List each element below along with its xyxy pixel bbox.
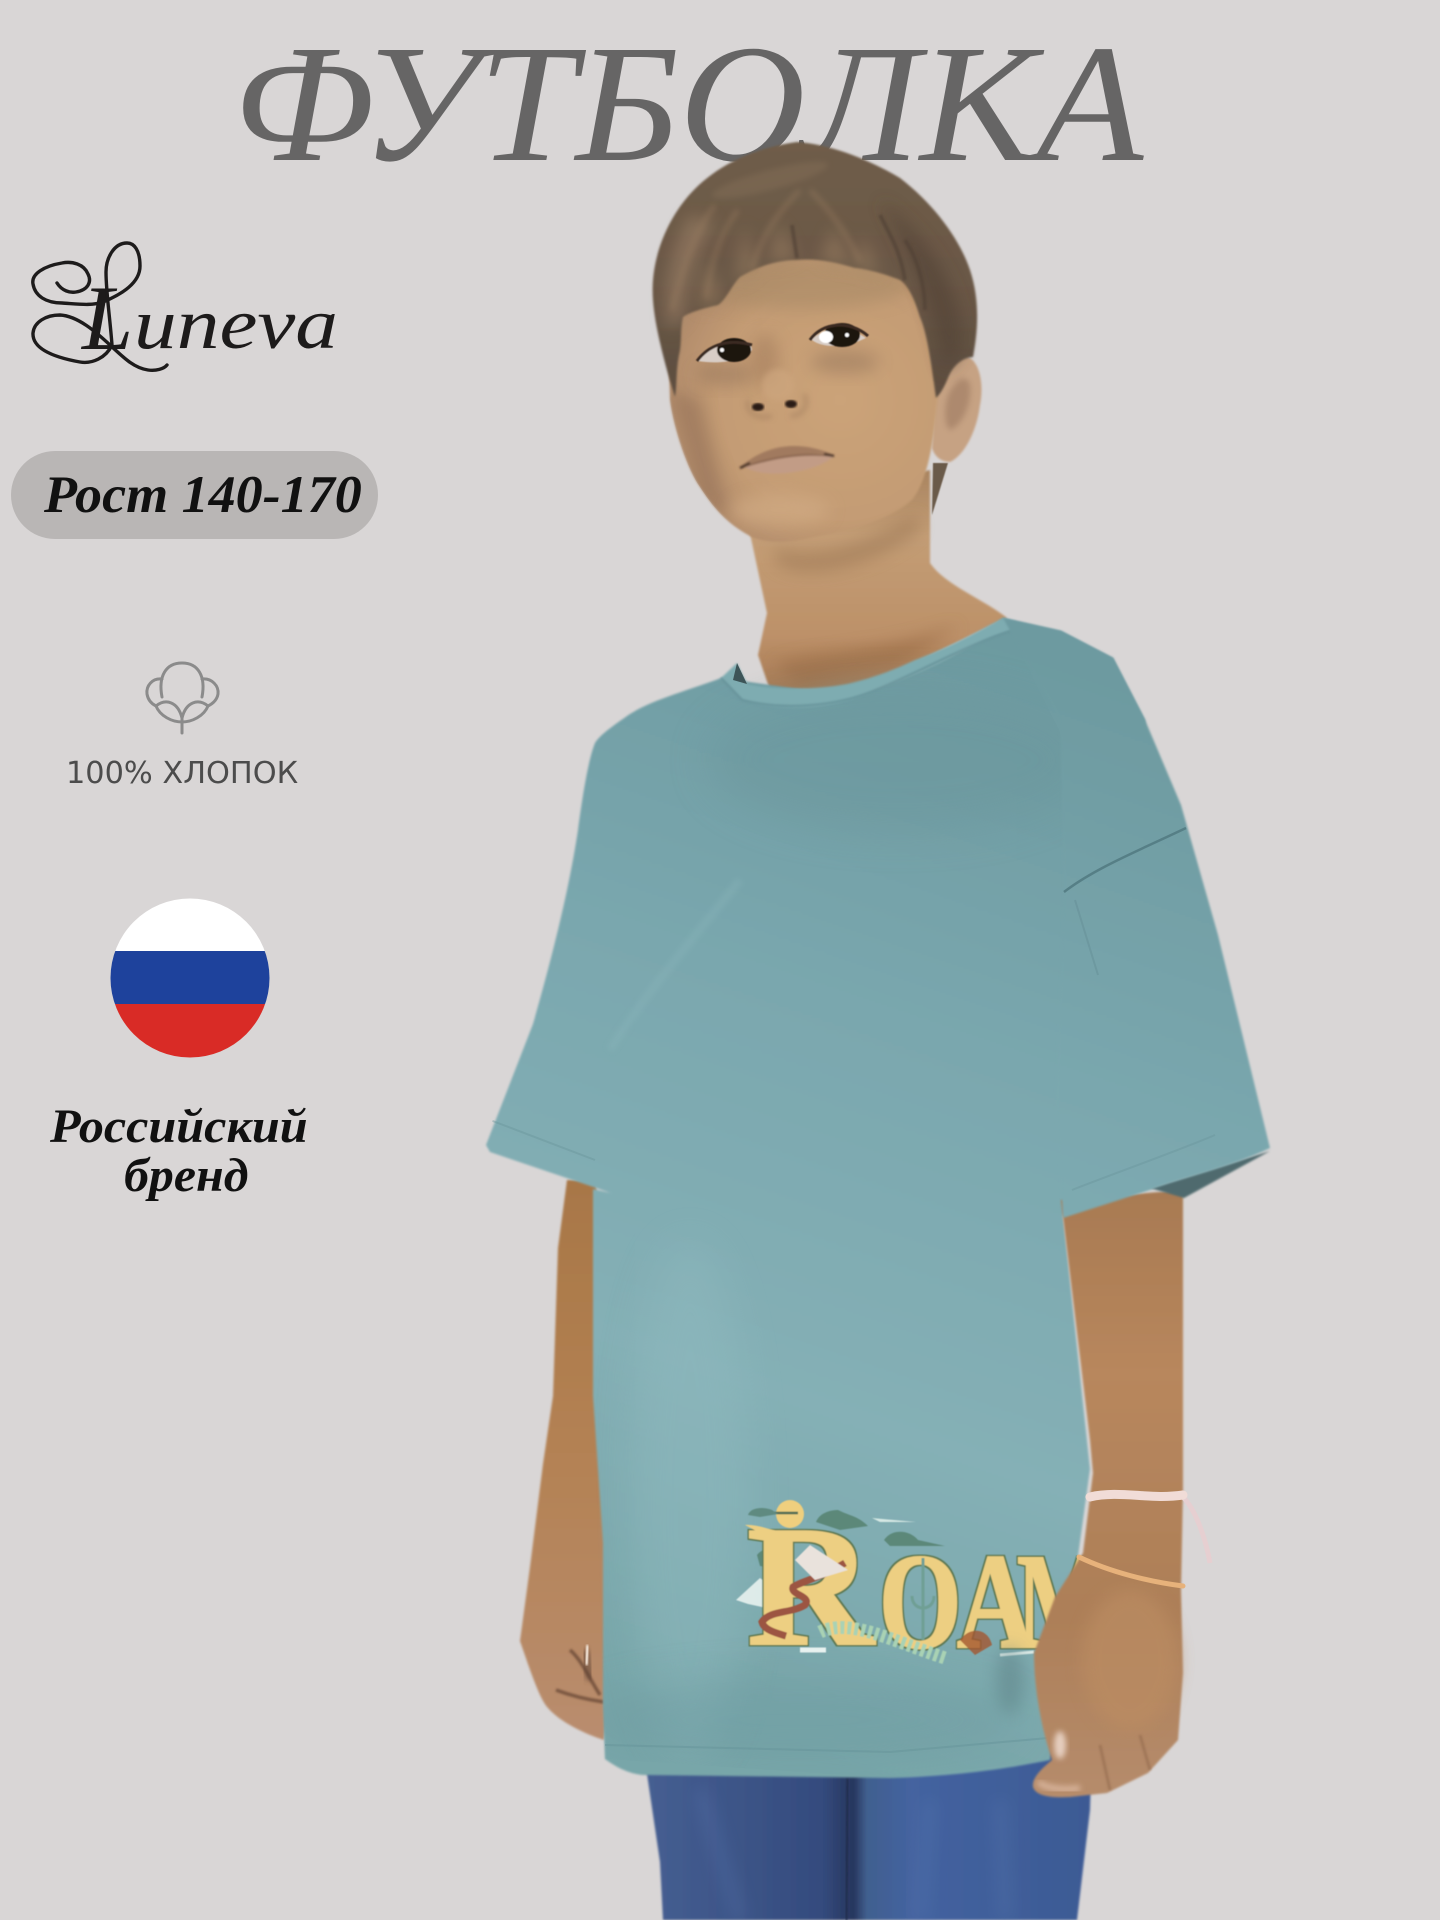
- brand origin caption: бренд: [124, 1148, 248, 1202]
- photo: boy in t-shirt: [486, 142, 1270, 1920]
- ear: [932, 357, 982, 462]
- print lettering: R: [747, 1491, 875, 1682]
- t-shirt right sleeve: [1003, 618, 1270, 1218]
- height badge: Рост 140-170: [43, 464, 362, 524]
- print lettering: [747, 1491, 1106, 1682]
- brand origin caption: [49, 1099, 308, 1202]
- face: [668, 230, 938, 542]
- print lettering: O: [879, 1527, 962, 1677]
- jeans: [642, 1740, 1092, 1920]
- brand origin caption: Российский: [49, 1099, 308, 1153]
- title: ФУТБОЛКА: [233, 11, 1144, 197]
- shadow by hand: [996, 1646, 1024, 1714]
- nose: [748, 369, 806, 417]
- print lettering: M: [1017, 1527, 1106, 1677]
- left arm and hand: [520, 1180, 610, 1740]
- t-shirt collar: [721, 618, 1024, 707]
- hair back and neck: [745, 463, 1007, 690]
- mouth: [740, 446, 834, 474]
- fabric shading: [490, 690, 1090, 1760]
- eye left: [697, 338, 752, 362]
- material label: 100% ХЛОПОК: [66, 756, 298, 791]
- t-shirt body: [486, 618, 1145, 1778]
- print mountain left: [736, 1578, 782, 1610]
- head: [653, 142, 982, 542]
- eye right: [810, 323, 868, 347]
- brand logo: Luneva: [33, 243, 338, 370]
- hair: [653, 142, 977, 398]
- right arm and hand: [1033, 1190, 1183, 1797]
- icon: cotton flower: [147, 663, 218, 733]
- face shading: [670, 261, 910, 526]
- print: ROAM graphic: [736, 1491, 1106, 1682]
- brand logo: Luneva: L: [80, 267, 133, 369]
- icon: Russian flag: [110, 898, 270, 1058]
- height badge: [11, 451, 378, 539]
- bracelets: [1079, 1494, 1210, 1586]
- print sun and clouds: [748, 1500, 945, 1570]
- print lettering: A: [957, 1527, 1034, 1677]
- brand logo: Luneva: uneva: [134, 285, 338, 364]
- print details: [745, 1525, 1034, 1658]
